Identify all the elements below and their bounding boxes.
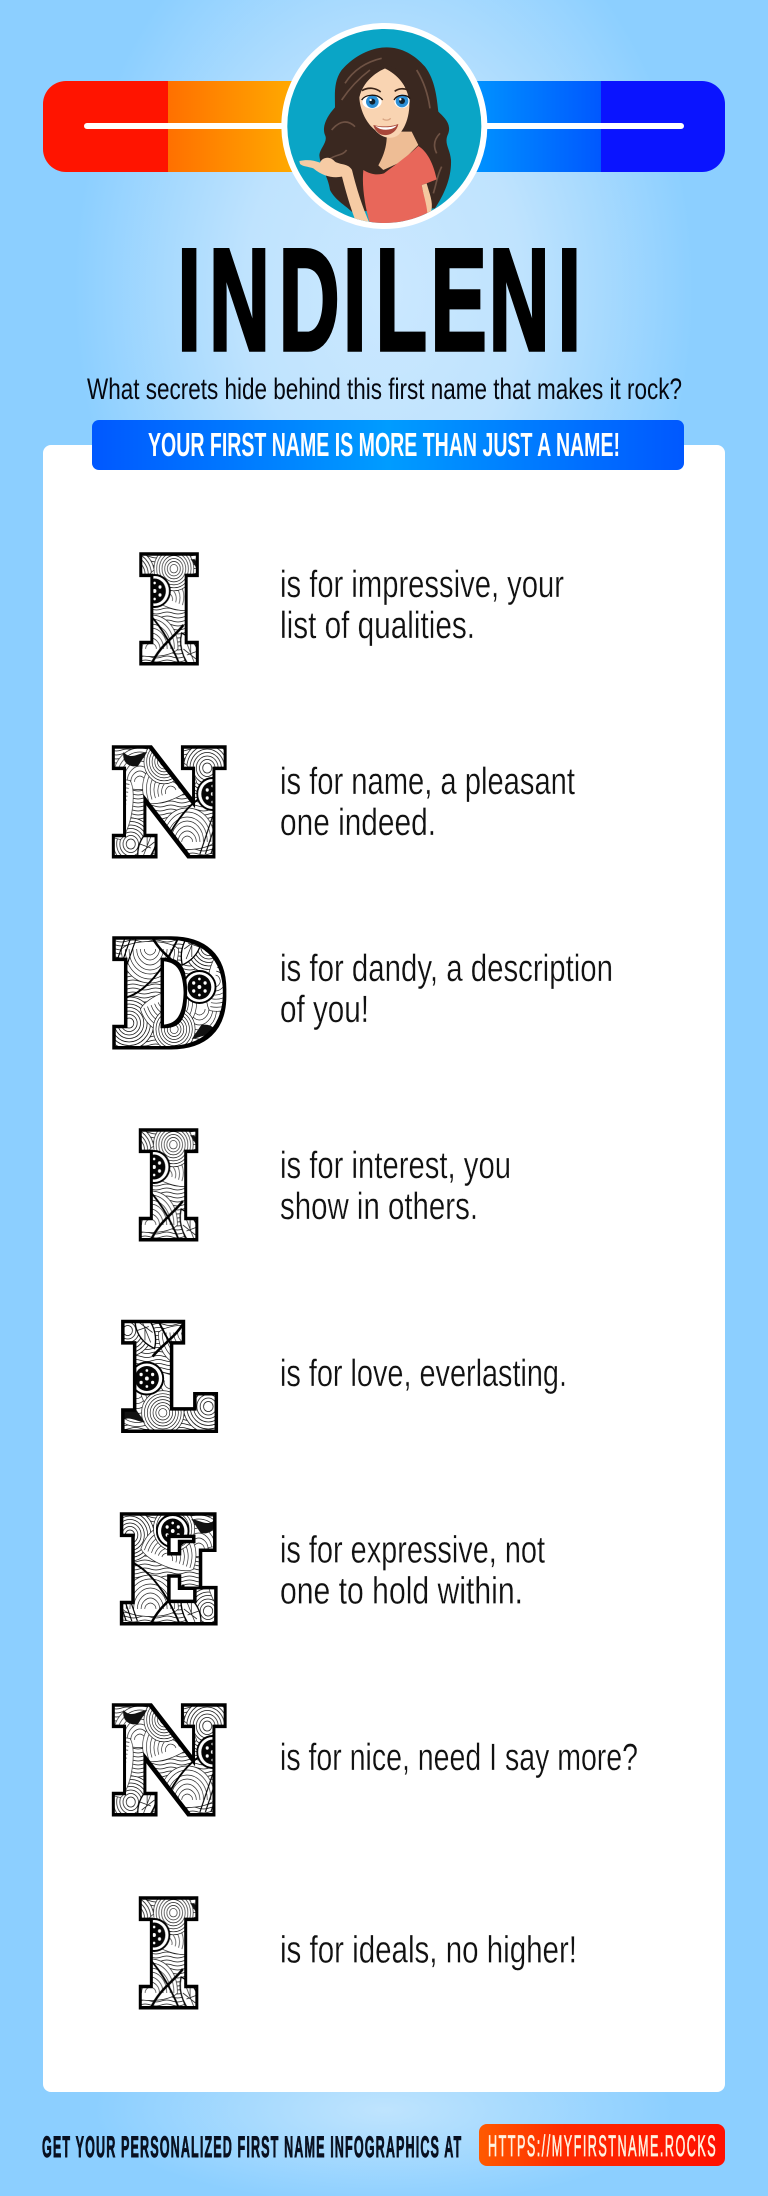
avatar: woman in circle [284,26,484,226]
letter E: E [122,1494,216,1649]
row: E is for expressive [122,1494,545,1649]
description [280,761,575,844]
description: is for impressive, your [280,564,564,606]
description: list of qualities. [280,605,475,647]
description: one indeed. [280,802,436,844]
description: show in others. [280,1186,478,1228]
row: I is for interest [141,1109,511,1265]
row: I is for impressive [141,533,564,689]
row: L is for love [123,1301,567,1456]
letter L: L [123,1301,213,1456]
letter I: I [141,1109,196,1265]
description: is for nice, need I say more? [280,1737,638,1779]
header ribbon bar [43,81,725,172]
letter I: I [141,1877,196,2033]
letter D: D [115,918,223,1073]
banner [92,420,684,470]
description: of you! [280,989,369,1031]
description [280,1530,545,1612]
description: is for name, a pleasant [280,761,575,803]
letter N: N [114,727,224,881]
title: INDILENI [177,220,581,382]
description: is for interest, you [280,1145,511,1187]
description: is for expressive, not [280,1530,545,1572]
row: N is for nice [114,1685,638,1839]
footer url button: HTTPS://MYFIRSTNAME.ROCKS [488,2129,716,2163]
description [280,564,564,647]
row: N is for name [114,727,575,881]
description [280,948,613,1031]
description: is for dandy, a description [280,948,613,990]
white content panel [43,445,725,2092]
letter N: N [114,1685,224,1839]
description: is for love, everlasting. [280,1353,567,1395]
description [280,1145,511,1228]
description: is for ideals, no higher! [280,1930,577,1972]
footer call to action: GET YOUR PERSONALIZED FIRST NAME INFOGRAPHICS AT [42,2130,461,2164]
row: I is for ideals [141,1877,577,2033]
letter I: I [141,533,197,689]
description: one to hold within. [280,1570,523,1612]
row: D is for dandy [115,918,613,1073]
